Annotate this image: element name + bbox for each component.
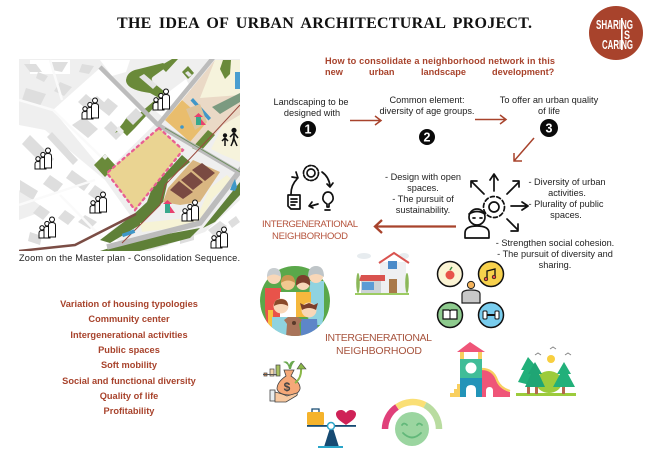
step 1 xyxy=(273,97,349,137)
icon: house xyxy=(355,253,409,295)
arrow: step 2 to 3 xyxy=(475,115,506,124)
arrow: actor to neighborhood xyxy=(375,220,456,233)
step 3: of life xyxy=(538,106,560,116)
question heading: development? xyxy=(492,67,555,77)
icon: family in green circle xyxy=(260,266,330,337)
icon: trees and park xyxy=(516,347,576,396)
question heading: landscape xyxy=(421,67,466,77)
step 2: 2 xyxy=(424,130,431,144)
icon: thinking person with gear and arrows xyxy=(465,174,528,238)
yellow garden with playground xyxy=(165,100,207,142)
arrow: step 3 down to actor xyxy=(514,138,534,161)
key themes list: Public spaces xyxy=(98,345,160,355)
sports field plot xyxy=(163,160,220,205)
icon: gear, idea and document cycle xyxy=(288,166,333,210)
site master plan map xyxy=(19,58,242,251)
thin context streets xyxy=(19,63,92,228)
icon: money bag in hand with growth xyxy=(263,361,306,402)
text: diversity and plurality: - Diversity of urban xyxy=(528,177,606,187)
people markers xyxy=(82,98,98,119)
text: social cohesion: - Strengthen social cohesion. xyxy=(496,238,614,248)
playground bottom xyxy=(165,203,170,213)
brown path xyxy=(19,214,136,251)
text: social cohesion: - The pursuit of diversity and xyxy=(497,249,613,259)
step 3: To offer an urban quality xyxy=(500,95,599,105)
question heading xyxy=(325,56,555,77)
key themes list: Profitability xyxy=(104,406,155,416)
text: diversity and plurality xyxy=(528,177,606,220)
key themes list xyxy=(60,299,198,416)
key themes list: Community center xyxy=(88,314,170,324)
question heading: urban xyxy=(369,67,395,77)
text: diversity and plurality: - Plurality of public xyxy=(528,199,604,209)
text: diversity and plurality: activities. xyxy=(548,188,586,198)
text: social cohesion xyxy=(496,238,614,270)
children xyxy=(272,317,290,337)
green park strip xyxy=(100,155,190,243)
icon: balance between work and heart xyxy=(307,409,356,448)
logo: sharing is caring xyxy=(589,6,643,60)
icon: money bag in hand with growth: $ xyxy=(284,380,291,394)
text: design with open spaces: spaces. xyxy=(407,183,439,193)
white context blocks xyxy=(19,60,240,251)
label: intergenerational neighborhood (bottom): INTERGENERATIONAL xyxy=(325,332,432,344)
icon: activities around a person xyxy=(438,262,504,328)
text: design with open spaces: - Design with open xyxy=(385,172,461,182)
key themes list: Social and functional diversity xyxy=(62,376,197,386)
logo: sharing is caring: S xyxy=(624,28,630,42)
text: diversity and plurality: spaces. xyxy=(550,210,582,220)
label: intergenerational neighborhood (bottom) xyxy=(325,332,432,357)
pink dotted project lot xyxy=(107,128,183,210)
parents xyxy=(280,292,296,317)
step 3: 3 xyxy=(546,122,553,136)
arrow: step 1 to 2 xyxy=(350,116,381,125)
text: design with open spaces: - The pursuit of xyxy=(392,194,454,204)
step 2: diversity of age groups. xyxy=(380,106,474,116)
question heading: How to consolidate a neighborhood network in this xyxy=(325,56,555,66)
key themes list: Soft mobility xyxy=(101,360,158,370)
step 2 xyxy=(380,95,474,145)
key themes list: Quality of life xyxy=(100,391,158,401)
step 1: Landscaping to be xyxy=(273,97,349,107)
label: intergenerational neighborhood (top) xyxy=(262,219,358,242)
icon: satisfaction gauge with smiley xyxy=(385,402,439,446)
text: social cohesion: sharing. xyxy=(539,260,571,270)
step 2: Common element: xyxy=(389,95,465,105)
question heading: new xyxy=(325,67,344,77)
label: intergenerational neighborhood (top): NEIGHBORHOOD xyxy=(272,231,348,242)
text: design with open spaces: sustainability. xyxy=(396,205,450,215)
map caption: Zoom on the Master plan - Consolidation Sequence. xyxy=(19,253,240,263)
step 3 xyxy=(500,95,599,137)
grey building footprints xyxy=(20,62,240,249)
icon: playground slide xyxy=(450,342,510,397)
label: intergenerational neighborhood (bottom): NEIGHBORHOOD xyxy=(336,345,422,357)
title: THE IDEA OF URBAN ARCHITECTURAL PROJECT. xyxy=(117,15,532,32)
step 1: designed with xyxy=(284,108,340,118)
key themes list: Intergenerational activities xyxy=(70,330,188,340)
east beige plot and cream buildings xyxy=(182,60,240,152)
step 1: 1 xyxy=(305,122,312,136)
housing row xyxy=(140,175,232,232)
key themes list: Variation of housing typologies xyxy=(60,299,198,309)
label: intergenerational neighborhood (top): INTERGENERATIONAL xyxy=(262,219,358,230)
green roundabout xyxy=(126,63,168,98)
grandparents xyxy=(265,288,281,328)
main roads xyxy=(100,58,242,247)
dog xyxy=(284,317,302,337)
small square and garden xyxy=(94,154,116,177)
text: design with open spaces xyxy=(385,172,461,215)
